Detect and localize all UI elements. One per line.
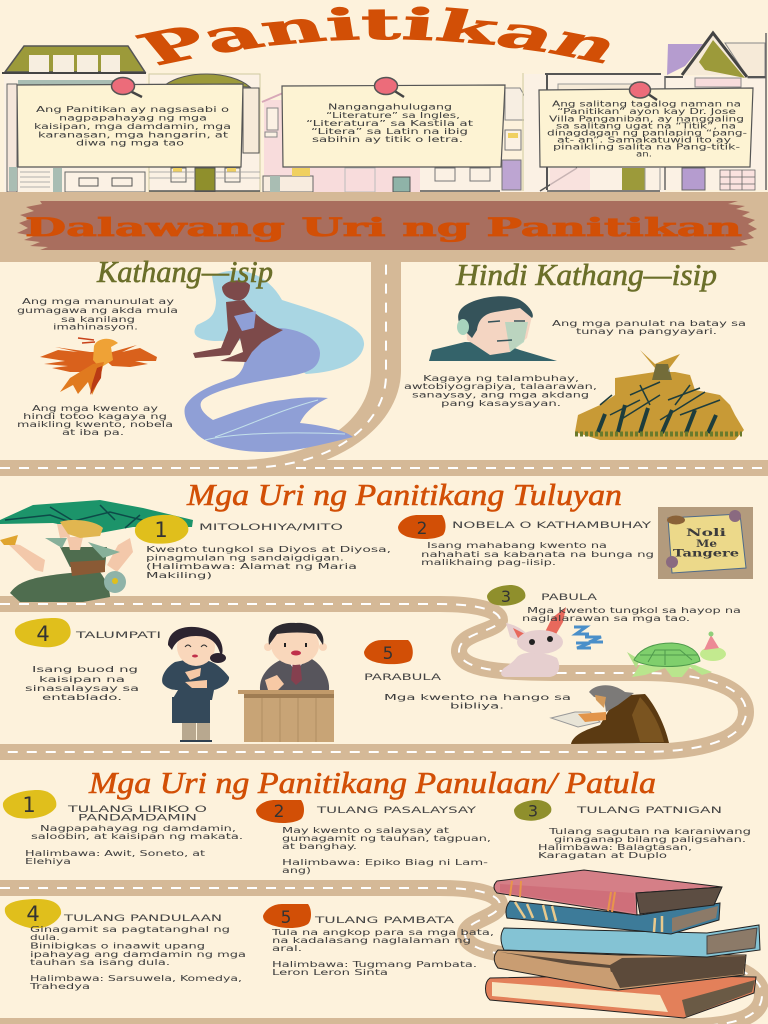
text: Talumpati: Isang buod ng <box>32 664 138 674</box>
badge: tuluyan 4: 4 <box>36 622 50 646</box>
badge: patula 1: 1 <box>22 793 36 817</box>
text: Tulang Patnigan: TULANG PATNIGAN <box>575 806 722 816</box>
illustration: mermaid <box>184 271 364 452</box>
badge: tuluyan 4 <box>15 618 71 647</box>
info card 2 <box>282 78 505 167</box>
street of buildings <box>2 33 766 192</box>
illustration: reading monk <box>551 685 669 744</box>
illustration: Jose Rizal portrait <box>429 296 557 361</box>
text: Tulang Pambata: aral. <box>272 943 302 953</box>
text: Tulang Pandulaan: Ginagamit sa pagtatanghal ng <box>30 924 230 934</box>
text: Nobela: NOBELA O KATHAMBUHAY <box>452 521 652 531</box>
title: Panitikan: Panitikan <box>134 6 610 66</box>
badge: tuluyan 5 <box>364 640 413 664</box>
text: Pabula: Mga kwento tungkol sa hayop na <box>527 605 741 615</box>
info card 3: an. <box>636 150 652 159</box>
text: Kathang-isip description: imahinasyon. <box>53 322 138 332</box>
text: Hindi Kathang-isip description <box>552 318 746 336</box>
text: Nobela: malikhaing pag-iisip. <box>421 557 556 567</box>
info card 3: “Panitikan” ayon kay Dr. Jose <box>557 107 736 116</box>
badge: patula 4 <box>5 899 61 928</box>
heading: Hindi Kathang-isip: Hindi Kathang—isip <box>455 257 717 292</box>
text: Talumpati <box>25 631 161 702</box>
text: Tulang Pandulaan: Halimbawa: Sarsuwela, Komedya, <box>30 973 242 983</box>
text: Hindi Kathang-isip examples <box>404 373 597 408</box>
text: Parabula: Mga kwento na hango sa <box>384 692 571 702</box>
text: Talumpati: TALUMPATI <box>74 631 161 641</box>
text: Tulang Pandulaan: dula. <box>30 932 60 942</box>
text: Tulang Liriko: saloobin, at kaisipan ng makata. <box>31 831 243 841</box>
info card 3: Villa Panganiban, ay nanggaling <box>549 114 744 124</box>
info card 3: Ang salitang tagalog naman na <box>552 100 741 108</box>
illustration: rabbit <box>501 607 566 677</box>
info card 2: Nangangahulugang <box>328 102 452 112</box>
info card 3: dinagdagan ng panlaping “pang- <box>547 128 747 138</box>
pin icon <box>112 78 142 97</box>
info card 1: Ang Panitikan ay nagsasabi o <box>36 104 229 114</box>
info card 1: kaisipan, mga damdamin, mga <box>34 121 231 131</box>
text: Kathang-isip description: Ang mga manunulat ay <box>22 296 174 306</box>
tan ground band <box>0 192 768 262</box>
text: Kathang-isip description <box>17 296 178 332</box>
book 5 <box>486 975 756 1018</box>
podium <box>238 690 334 742</box>
badge: patula 1 <box>3 790 56 819</box>
text: Kathang-isip description: gumagawa ng akda mula <box>17 305 178 315</box>
text: Kathang-isip examples: Ang mga kwento ay <box>32 403 158 413</box>
badge: patula 3: 3 <box>528 802 538 820</box>
text: Kathang-isip examples: at iba pa. <box>62 427 124 437</box>
text: Tulang Patnigan: Tulang sagutan na karaniwang <box>547 826 751 836</box>
text: Tulang Pambata: Halimbawa: Tugmang Pambata. <box>272 959 477 969</box>
building: arched house <box>149 74 260 192</box>
illustration: Noli Me Tangere book cover: Me <box>696 538 717 550</box>
text: Parabula: bibliya. <box>450 700 504 710</box>
text: Parabula <box>364 673 571 710</box>
text: Mitolohiya: Makiling) <box>146 570 212 580</box>
text: Tulang Pandulaan: Binibigkas o inaawit upang <box>30 940 205 950</box>
road: section 1 <box>0 262 768 476</box>
badge: patula 2: 2 <box>274 802 284 822</box>
badge: patula 3 <box>514 800 551 821</box>
illustration: man speaker at podium <box>238 623 334 742</box>
illustration: stack of books <box>486 870 760 1018</box>
pin icon <box>630 82 657 100</box>
text: Parabula: PARABULA <box>364 673 442 683</box>
text: Tulang Liriko <box>25 805 243 866</box>
text: Tulang Pandulaan: TULANG PANDULAAN <box>62 914 222 924</box>
banner: Dalawang Uri ng Panitikan: Dalawang Uri ng Panitikan <box>25 213 742 242</box>
building: right house with purple roof <box>665 33 766 190</box>
text: Talumpati: entablado. <box>42 692 122 702</box>
badge: tuluyan 3 <box>487 585 525 606</box>
badge: tuluyan 2: 2 <box>417 519 427 539</box>
info card 3: at- an”. Samakatuwid ito ay <box>557 136 732 145</box>
text: Tulang Pasalaysay: Halimbawa: Epiko Biag ni Lam- <box>282 857 488 867</box>
text: Hindi Kathang-isip examples: pang kasaysayan. <box>441 398 561 408</box>
text: Tulang Liriko: PANDAMDAMIN <box>78 814 197 824</box>
text: Tulang Pasalaysay: TULANG PASALAYSAY <box>315 806 477 816</box>
text: Talumpati: sinasalaysay sa <box>25 683 139 693</box>
text: Tulang Pambata: Leron Leron Sinta <box>272 967 388 977</box>
text: Tulang Liriko: Elehiya <box>25 856 71 866</box>
text: Tulang Pandulaan: ipahayag ang damdamin ng mga <box>30 949 246 959</box>
text: Nobela: nahahati sa kabanata na bunga ng <box>421 549 654 559</box>
book 3 <box>501 925 760 957</box>
road: section 3 <box>0 888 762 1024</box>
text: Hindi Kathang-isip examples: sanaysay, ang mga akdang <box>412 390 589 400</box>
info card 2: sabihin ay titik o letra. <box>312 134 463 144</box>
badge: patula 2 <box>256 800 304 823</box>
banner: Dalawang Uri ng Panitikan <box>17 201 757 250</box>
illustration: woman speaker <box>162 627 229 742</box>
text: Hindi Kathang-isip examples: Kagaya ng talambuhay, <box>423 373 579 383</box>
text: Tulang Liriko: TULANG LIRIKO O <box>66 805 207 815</box>
info card 2: “Litera” sa Latin na ibig <box>311 126 468 136</box>
text: Tulang Pandulaan: Trahedya <box>28 981 90 991</box>
info card 3 <box>539 82 753 167</box>
badge: tuluyan 2 <box>398 515 446 539</box>
text: Mitolohiya: MITOLOHIYA/MITO <box>199 523 343 533</box>
text: Talumpati: kaisipan na <box>39 674 125 684</box>
text: Kathang-isip examples: maikling kwento, nobela <box>17 419 173 429</box>
text: Tulang Pandulaan: tauhan sa isang dula. <box>30 957 170 967</box>
text: Hindi Kathang-isip description: tunay na pangyayari. <box>576 326 717 336</box>
illustration: goddess with leaf <box>0 500 193 602</box>
text: Hindi Kathang-isip examples: awtobiyograpiya, talaarawan, <box>404 381 597 391</box>
text: Pabula: PABULA <box>541 593 598 603</box>
text: Tulang Pambata: na kadalasang naglalaman ng <box>272 935 471 945</box>
text: Tulang Liriko: Nagpapahayag ng damdamin, <box>40 823 236 833</box>
info card 1: nagpapahayag ng mga <box>59 112 207 122</box>
badge: tuluyan 5: 5 <box>383 644 393 664</box>
illustration: Noli Me Tangere book cover <box>658 507 753 579</box>
building: pink house <box>262 93 424 192</box>
text: Nobela <box>421 521 654 567</box>
icon: phoenix <box>40 338 157 395</box>
text: Tulang Patnigan: Karagatan at Duplo <box>538 850 667 860</box>
text: Tulang Pasalaysay <box>282 806 491 875</box>
info card 2: “Literature” sa Ingles, <box>326 110 460 120</box>
illustration: Noli Me Tangere book cover: Tangere <box>673 548 739 560</box>
text: Kathang-isip examples: hindi totoo kagaya ng <box>23 411 167 421</box>
book 4 <box>494 950 746 990</box>
heading: Mga Uri ng Panitikang Panulaan/ Patula: Mga Uri ng Panitikang Panulaan/ Patula <box>88 765 656 800</box>
text: Mitolohiya: pinagmulan ng sandaigdigan. <box>146 552 344 562</box>
info card 1 <box>17 78 243 167</box>
illustration: monument <box>575 350 744 440</box>
badge: patula 4: 4 <box>26 902 40 926</box>
info card 1: karanasan, mga hangarin, at <box>38 130 229 140</box>
heading: Kathang-isip: Kathang—isip <box>96 254 273 289</box>
text: Tulang Patnigan: Halimbawa: Balagtasan, <box>538 842 692 852</box>
badge: tuluyan 3: 3 <box>501 587 511 606</box>
info card 3: sa salitang ugat na “Titik”, na <box>556 122 736 130</box>
illustration: Noli Me Tangere book cover: Noli <box>686 527 726 539</box>
text: Tulang Pasalaysay: gumagamit ng tauhan, tagpuan, <box>282 833 491 843</box>
info card 2: “Literatura” sa Kastila at <box>306 118 474 128</box>
text: Mitolohiya <box>146 523 391 580</box>
road: section 2 <box>0 604 746 752</box>
text: Tulang Patnigan <box>538 806 751 860</box>
text: Mitolohiya: Kwento tungkol sa Diyos at Diyosa, <box>146 544 391 554</box>
icon: sleeping Z <box>574 627 603 648</box>
text: Tulang Patnigan: ginaganap bilang paligsahan. <box>554 834 746 844</box>
pin icon <box>374 78 404 97</box>
text: Nobela: Isang mahabang kwento na <box>427 540 607 550</box>
text: Tulang Pasalaysay: ang) <box>282 865 311 875</box>
text: Tulang Pasalaysay: at banghay. <box>282 841 357 851</box>
badge: tuluyan 1: 1 <box>154 518 168 542</box>
info card 3: pinaikling salita na Pang-titik- <box>553 142 740 152</box>
badge: patula 5: 5 <box>281 908 291 928</box>
badge: tuluyan 1 <box>135 515 188 544</box>
text: Pabula: naglalarawan sa mga tao. <box>522 613 690 623</box>
book 2 <box>506 901 720 934</box>
info card 1: diwa ng mga tao <box>76 138 184 148</box>
text: Tulang Pambata: Tula na angkop para sa mga bata, <box>270 927 494 937</box>
text: Kathang-isip description: sa kanilang <box>61 314 135 324</box>
text: Hindi Kathang-isip description: Ang mga panulat na batay sa <box>552 318 746 328</box>
building: left house <box>2 46 146 192</box>
text: Mitolohiya: (Halimbawa: Alamat ng Maria <box>146 561 357 571</box>
badge: patula 5 <box>263 904 311 928</box>
illustration: turtle <box>627 632 726 677</box>
building: cream house with purple door <box>420 73 538 192</box>
text: Tulang Pambata: TULANG PAMBATA <box>313 916 455 926</box>
text: Tulang Pasalaysay: May kwento o salaysay at <box>282 825 450 835</box>
heading: Mga Uri ng Panitikang Tuluyan: Mga Uri ng Panitikang Tuluyan <box>186 477 622 512</box>
book 1 <box>494 870 722 915</box>
building: right center house <box>524 74 665 192</box>
text: Tulang Liriko: Halimbawa: Awit, Soneto, at <box>25 848 206 858</box>
text: Kathang-isip examples <box>17 403 173 437</box>
text: Tulang Pambata <box>270 916 494 977</box>
text: Pabula <box>522 593 741 623</box>
text: Tulang Pandulaan <box>28 914 246 991</box>
